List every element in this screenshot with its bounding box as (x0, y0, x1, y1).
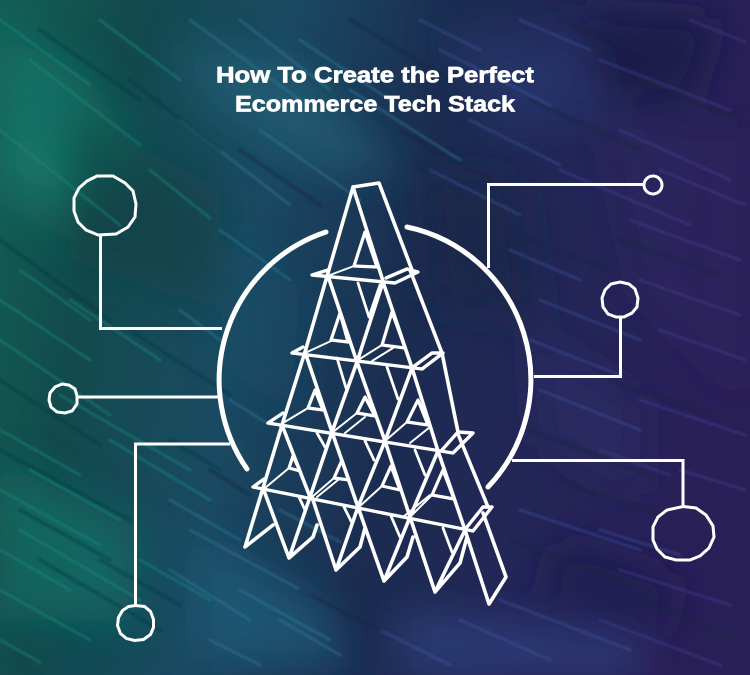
connector: bottom right node (512, 460, 714, 560)
connector: middle right node (534, 282, 638, 376)
circuit ring around the card house (219, 227, 531, 487)
connector: bottom left node (118, 444, 230, 640)
inverted gaps and diagonal shelf edges (299, 283, 452, 552)
connector: middle left node (49, 384, 219, 413)
light blue streaks, centre (170, 20, 460, 665)
title (216, 62, 535, 116)
connector: top left node (74, 176, 222, 328)
light indigo streaks, right (380, 20, 680, 665)
icon: house of cards (245, 183, 506, 604)
light teal streaks, left (0, 20, 210, 662)
title: How To Create the Perfect (216, 62, 535, 88)
small A triangles (289, 232, 454, 499)
main card legs (245, 183, 506, 604)
dark streaks (0, 30, 230, 630)
shelves (253, 269, 492, 531)
title: Ecommerce Tech Stack (235, 92, 516, 116)
connector: top right node (488, 176, 662, 268)
